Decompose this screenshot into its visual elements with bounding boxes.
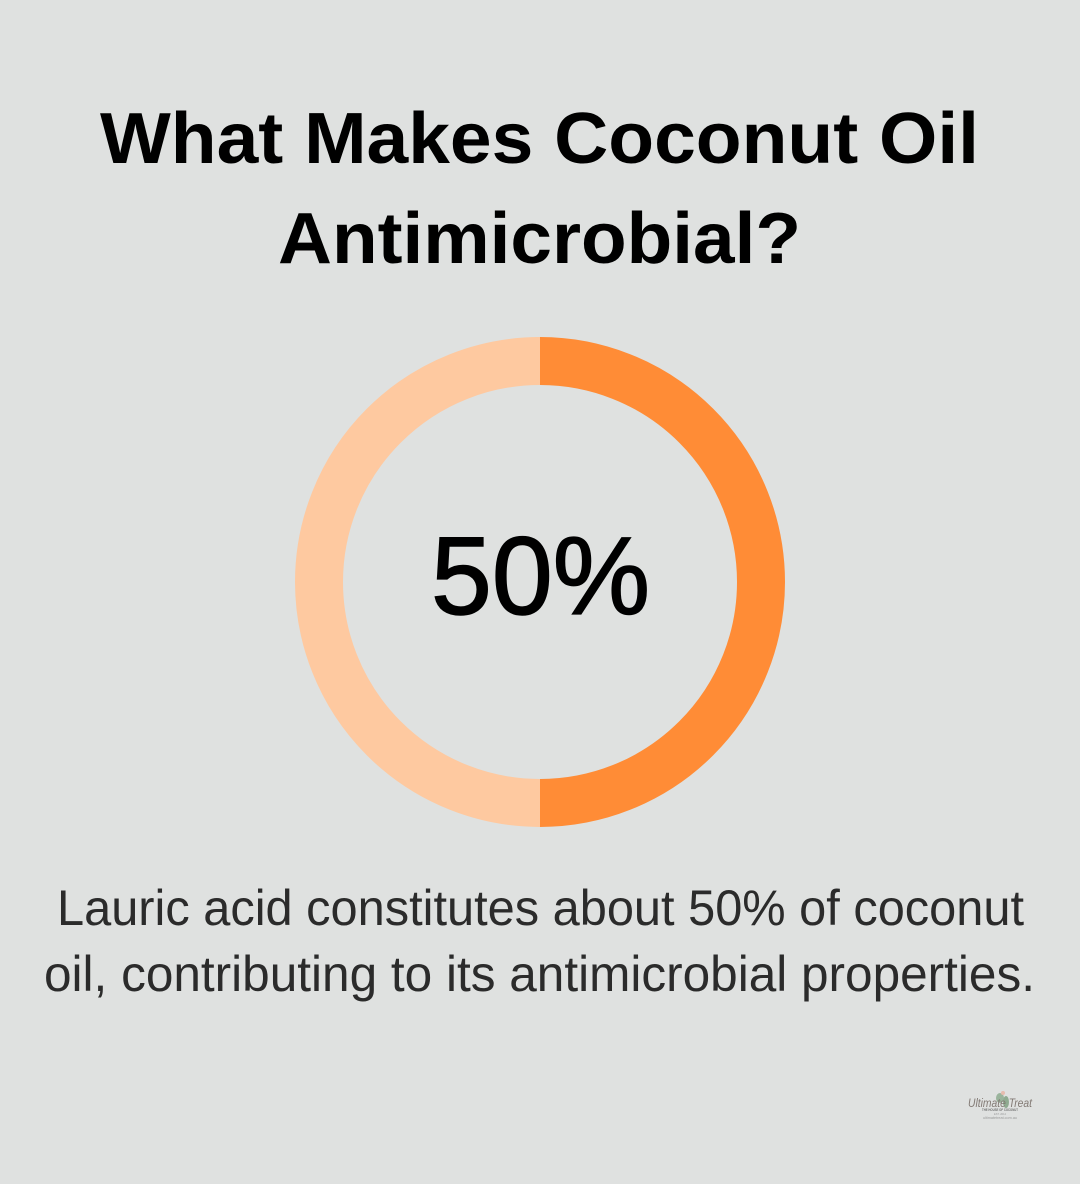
logo: Ultimate Treat bbox=[968, 1091, 1033, 1120]
lauric acid segment bbox=[540, 361, 761, 803]
logo: Ultimate Treat: Ultimate Treat bbox=[968, 1096, 1033, 1110]
description text bbox=[44, 880, 1035, 1002]
description text: oil, contributing to its antimicrobial properties. bbox=[44, 946, 1035, 1002]
logo: Ultimate Treat: EST. 2014 bbox=[994, 1112, 1006, 1116]
title: Antimicrobial? bbox=[278, 199, 801, 279]
remaining segment bbox=[319, 361, 540, 803]
title bbox=[100, 99, 979, 279]
description text: Lauric acid constitutes about 50% of coconut bbox=[57, 880, 1024, 936]
donut chart: 50% bbox=[319, 361, 761, 803]
center value: 50% bbox=[431, 515, 650, 638]
logo: Ultimate Treat: THE HOUSE OF COCONUT bbox=[982, 1108, 1019, 1112]
title: What Makes Coconut Oil bbox=[100, 99, 979, 179]
logo: Ultimate Treat: ultimatetreat.com.au bbox=[983, 1116, 1017, 1120]
